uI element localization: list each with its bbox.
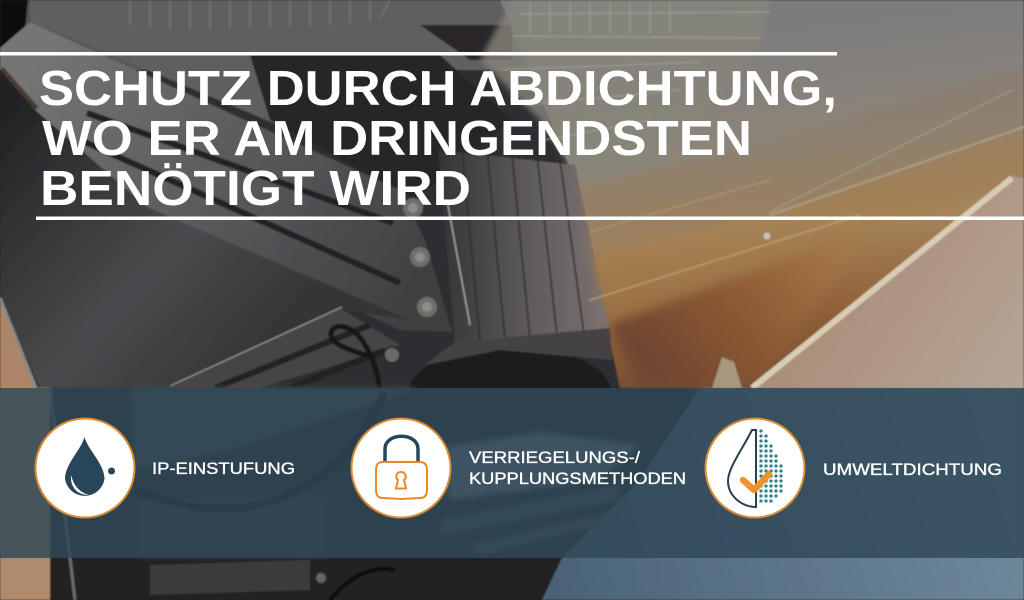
- cable loop and fitting: [331, 326, 400, 392]
- label: Verriegelungs-/Kupplungsmethoden: VERRIEGELUNGS-/: [469, 449, 640, 467]
- icon: padlock: [352, 418, 450, 518]
- dark curved underside: [0, 70, 410, 388]
- title: [39, 62, 837, 216]
- bolts: [403, 198, 437, 317]
- motor housing: [438, 150, 610, 342]
- check mark: [743, 474, 769, 490]
- title bottom rule: [36, 216, 1024, 220]
- label: IP-Einstufung: IP-EINSTUFUNG: [152, 460, 295, 478]
- blue translucent band: [0, 388, 1024, 558]
- ribs on housing: [462, 150, 584, 340]
- label: Verriegelungs-/Kupplungsmethoden: [469, 449, 686, 488]
- fan housing top: [0, 0, 560, 70]
- item: IP rating: [36, 418, 295, 518]
- title: BENÖTIGT WIRD: [40, 162, 471, 216]
- title top rule: [0, 52, 837, 56]
- label: Verriegelungs-/Kupplungsmethoden: KUPPLUNGSMETHODEN: [469, 470, 686, 488]
- striped fin block: [752, 176, 1024, 388]
- fan grille: [480, 0, 770, 182]
- dot pattern: [761, 431, 781, 506]
- tan corner: [0, 298, 36, 388]
- strut: [170, 308, 400, 388]
- item: locking and coupling methods: [352, 418, 686, 518]
- warm right side: [500, 0, 1024, 388]
- icon: half drop with check: [706, 418, 804, 518]
- label: Umweltdichtung: UMWELTDICHTUNG: [823, 461, 1002, 479]
- icon: water drop: [36, 418, 134, 518]
- title: SCHUTZ DURCH ABDICHTUNG,: [39, 62, 837, 116]
- fan rib arcs: [130, 0, 390, 30]
- title: WO ER AM DRINGENDSTEN: [42, 112, 752, 166]
- drum under housing: [408, 345, 612, 445]
- photo continued below band: [0, 388, 60, 600]
- item: environmental sealing: [706, 418, 1002, 518]
- warm panels: [577, 70, 1024, 258]
- beam: [0, 22, 452, 332]
